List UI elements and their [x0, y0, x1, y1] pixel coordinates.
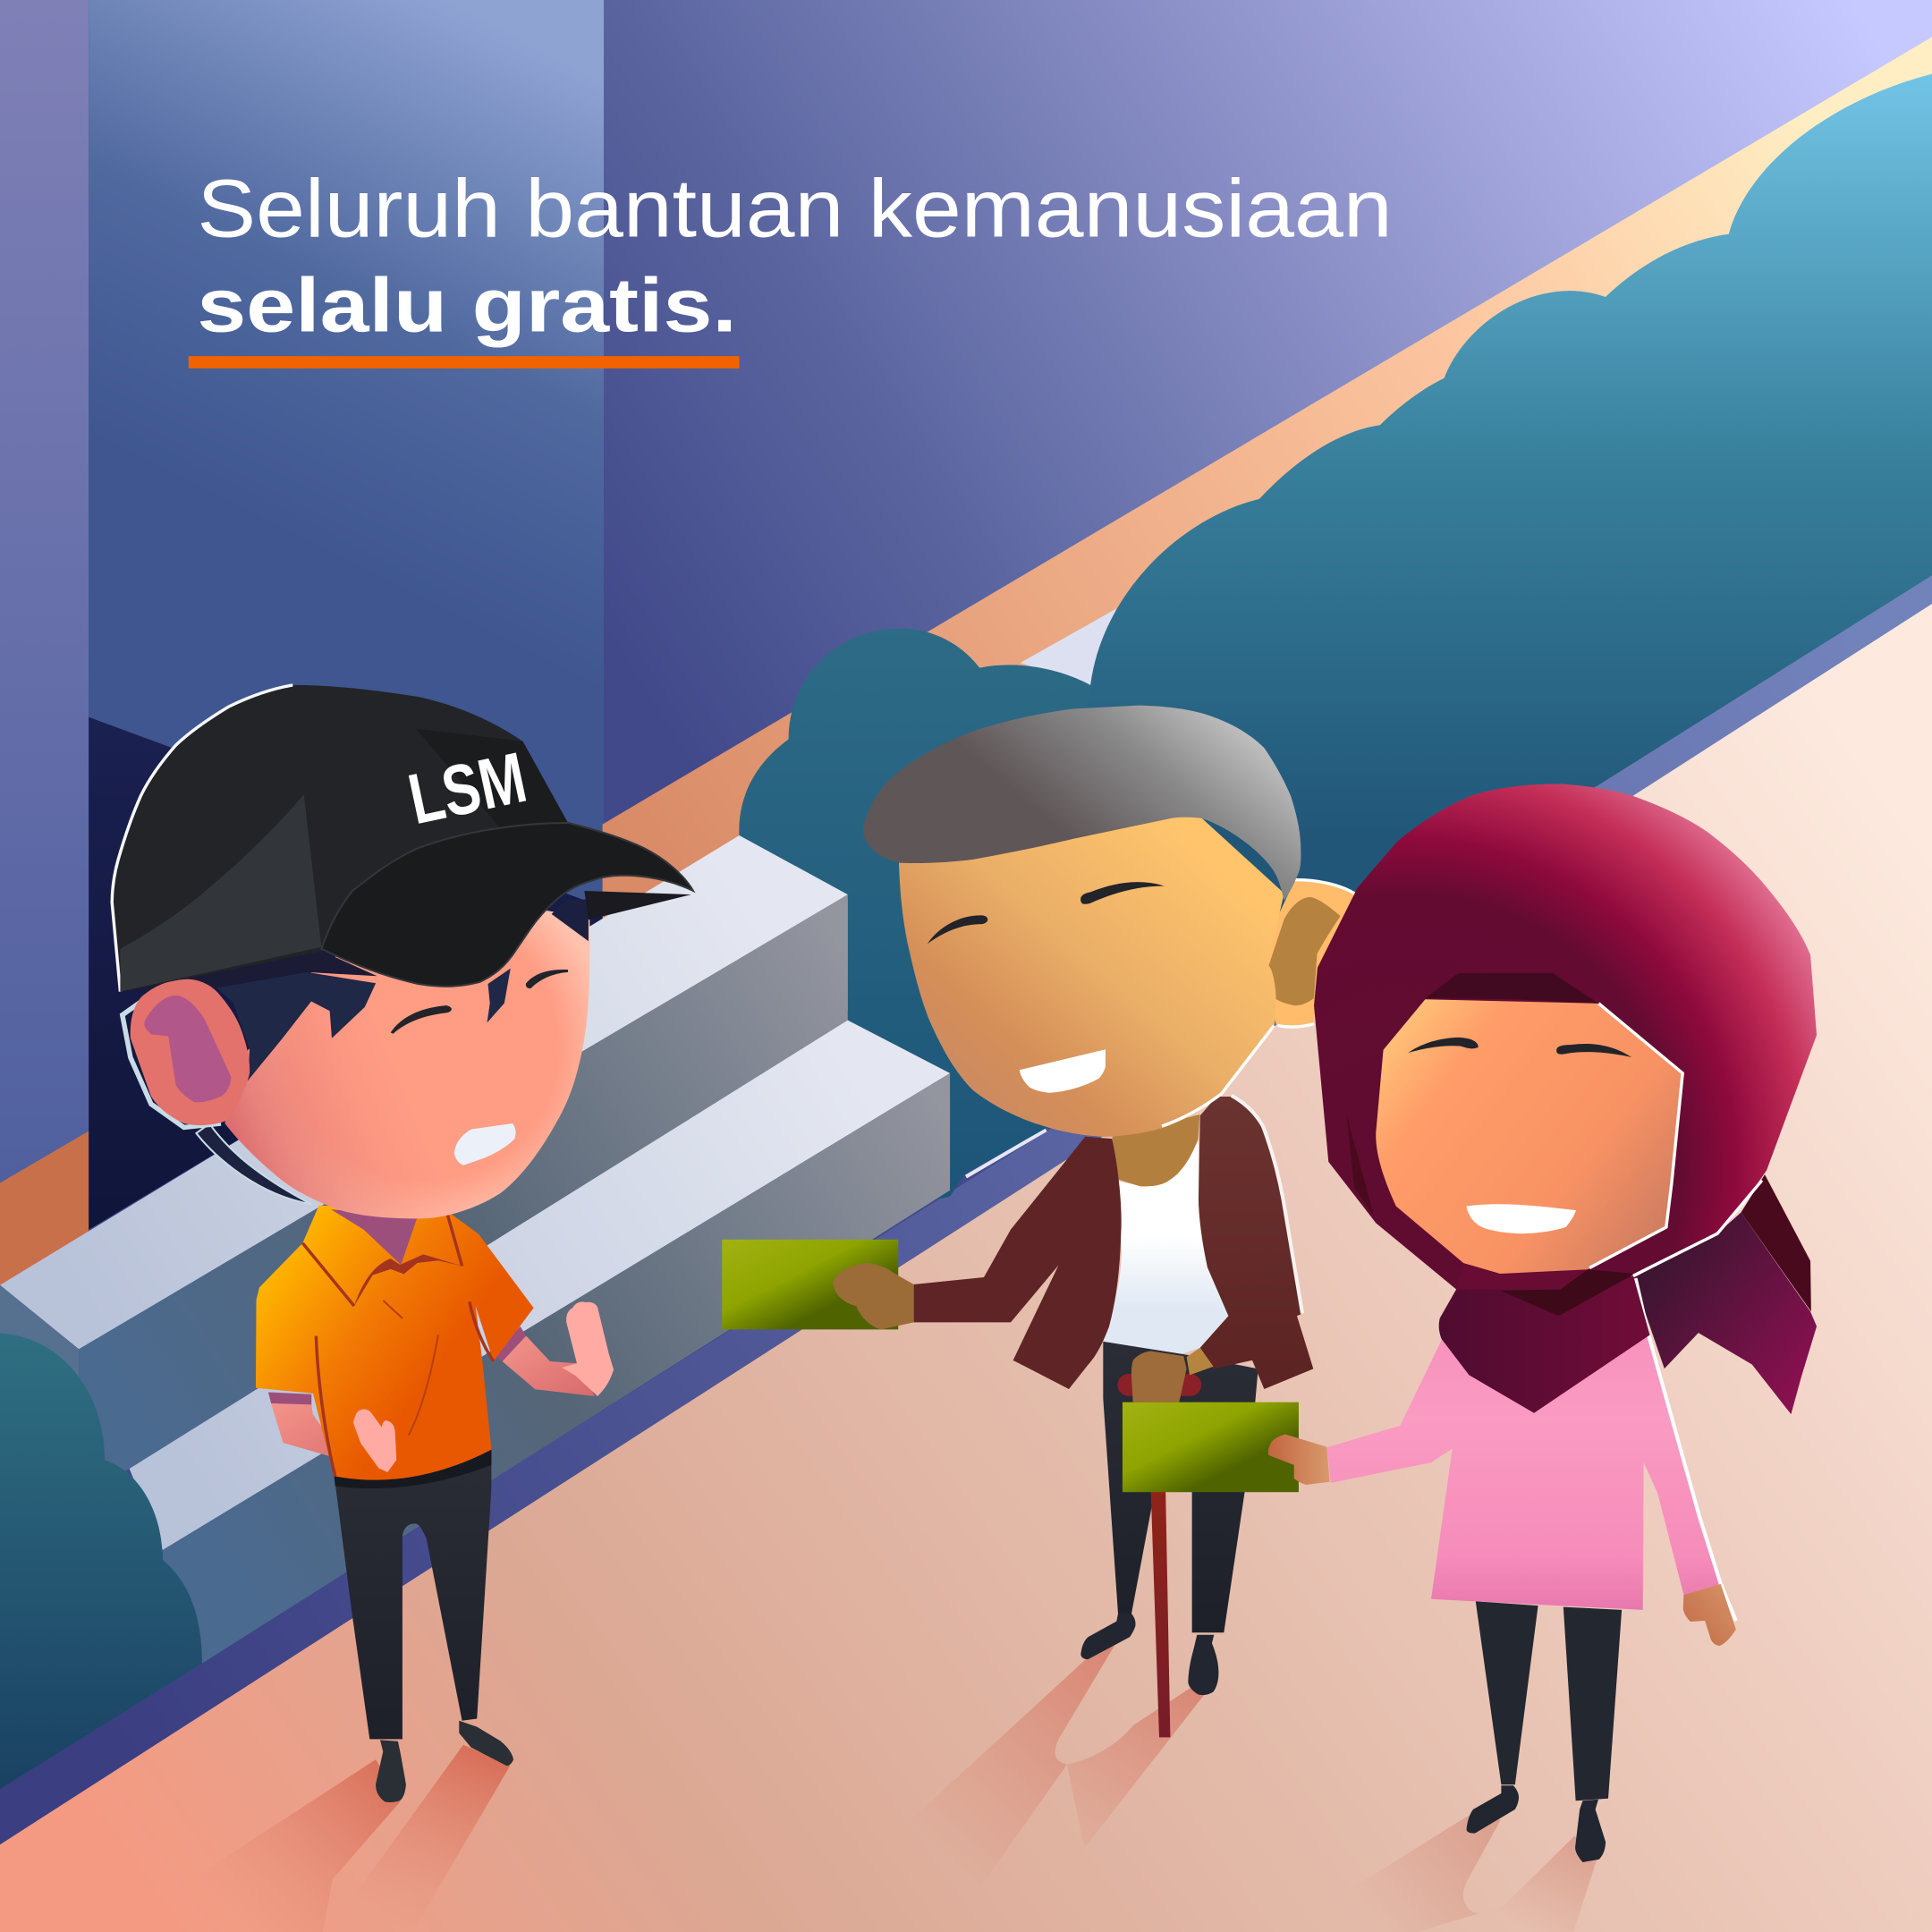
grey hair [863, 706, 1301, 901]
scarf shadow [1500, 1269, 1635, 1316]
orange underline [189, 356, 740, 369]
banknote held by woman [1123, 1402, 1299, 1492]
head [225, 905, 589, 1218]
pink dress [1327, 1337, 1721, 1610]
hair [216, 972, 376, 1080]
right bush [1060, 74, 1932, 973]
light wedge behind bush [1021, 609, 1116, 685]
ear outline [1277, 880, 1357, 1027]
head edge highlight [1162, 1026, 1274, 1126]
left arm cuff [268, 1392, 311, 1406]
trousers [335, 1450, 491, 1739]
right hand [562, 1301, 614, 1396]
blue curb strip [0, 575, 1932, 1844]
left bush [0, 1334, 202, 1789]
smile [1020, 1049, 1106, 1093]
lower neck scarf [1439, 1275, 1650, 1413]
cap crown [112, 685, 568, 992]
right arm cuff [494, 1326, 526, 1361]
hood band [1456, 1263, 1588, 1289]
heading line 1: Seluruh bantuan kemanusiaan [197, 161, 1393, 254]
shoes [1080, 1614, 1218, 1695]
shirt collar and folds [302, 1214, 494, 1476]
under brim [584, 891, 691, 919]
peach diagonal band [603, 37, 1932, 1011]
heading [189, 161, 1393, 369]
left hand [353, 1409, 396, 1472]
cap side panel [120, 794, 321, 992]
walkway ground [0, 604, 1932, 1932]
curb highlight [966, 1130, 1046, 1177]
hair behind brim [552, 900, 589, 941]
back scarf dark [1741, 1174, 1811, 1311]
hijab inner fold [1347, 1115, 1374, 1216]
character: woman in hijab [1123, 784, 1817, 1862]
stick handle [1117, 1374, 1201, 1396]
right hand [1683, 1584, 1736, 1646]
middle bush [739, 629, 1233, 1220]
white tee [1103, 1140, 1228, 1354]
ear [123, 979, 250, 1127]
eyebrows [1408, 1038, 1631, 1057]
hand on stick [1131, 1351, 1187, 1402]
forearm [1187, 1348, 1214, 1375]
hijab hood [1314, 784, 1817, 1291]
shoes [1467, 1785, 1606, 1862]
cap dark panel [416, 729, 568, 830]
brown jacket [914, 1096, 1313, 1389]
right arm [503, 1336, 595, 1396]
belt shadow [334, 1450, 491, 1488]
smile [1467, 1204, 1576, 1233]
shoes [376, 1721, 513, 1802]
shirt neck opening [331, 1209, 418, 1265]
dark doorway [89, 717, 603, 1230]
back scarf [1633, 1213, 1817, 1414]
head left shading [225, 905, 589, 1218]
forehead undercap [1426, 973, 1598, 1004]
scarf edge highlight [1633, 1181, 1762, 1275]
stairs [0, 835, 950, 1675]
orange shirt [256, 1206, 534, 1480]
hair strand [487, 969, 511, 1022]
cap brim [321, 823, 693, 987]
trousers [1103, 1342, 1258, 1632]
ground shadows [111, 1642, 1597, 1932]
eyebrows [928, 882, 1165, 944]
character: elderly man [722, 706, 1357, 1737]
hand holding banknote [833, 1263, 914, 1329]
left pillar [0, 0, 89, 1182]
eyebrows [391, 970, 568, 1034]
central pillar [89, 0, 604, 936]
left arm [271, 1403, 382, 1471]
banknote held by old man [722, 1240, 898, 1329]
face [1376, 999, 1682, 1274]
hand holding banknote [1268, 1434, 1330, 1485]
heading line 2: selalu gratis. [197, 264, 737, 349]
black cap [112, 685, 693, 992]
neck [1112, 1114, 1199, 1186]
ear inner [1265, 897, 1341, 1005]
character: LSM volunteer [112, 685, 693, 1802]
cap white outline [112, 685, 292, 992]
jaw outline [196, 1123, 311, 1204]
legs [1476, 1601, 1622, 1801]
mouth [454, 1123, 516, 1165]
ear backing [1257, 880, 1357, 1027]
hair band [120, 951, 377, 992]
face edge highlight [1589, 1004, 1682, 1268]
lower left wall band [0, 1131, 89, 1288]
walking stick [1151, 1491, 1170, 1737]
dress edge highlight [1636, 1278, 1736, 1621]
head [899, 801, 1284, 1137]
cap logo: LSM [402, 737, 533, 839]
